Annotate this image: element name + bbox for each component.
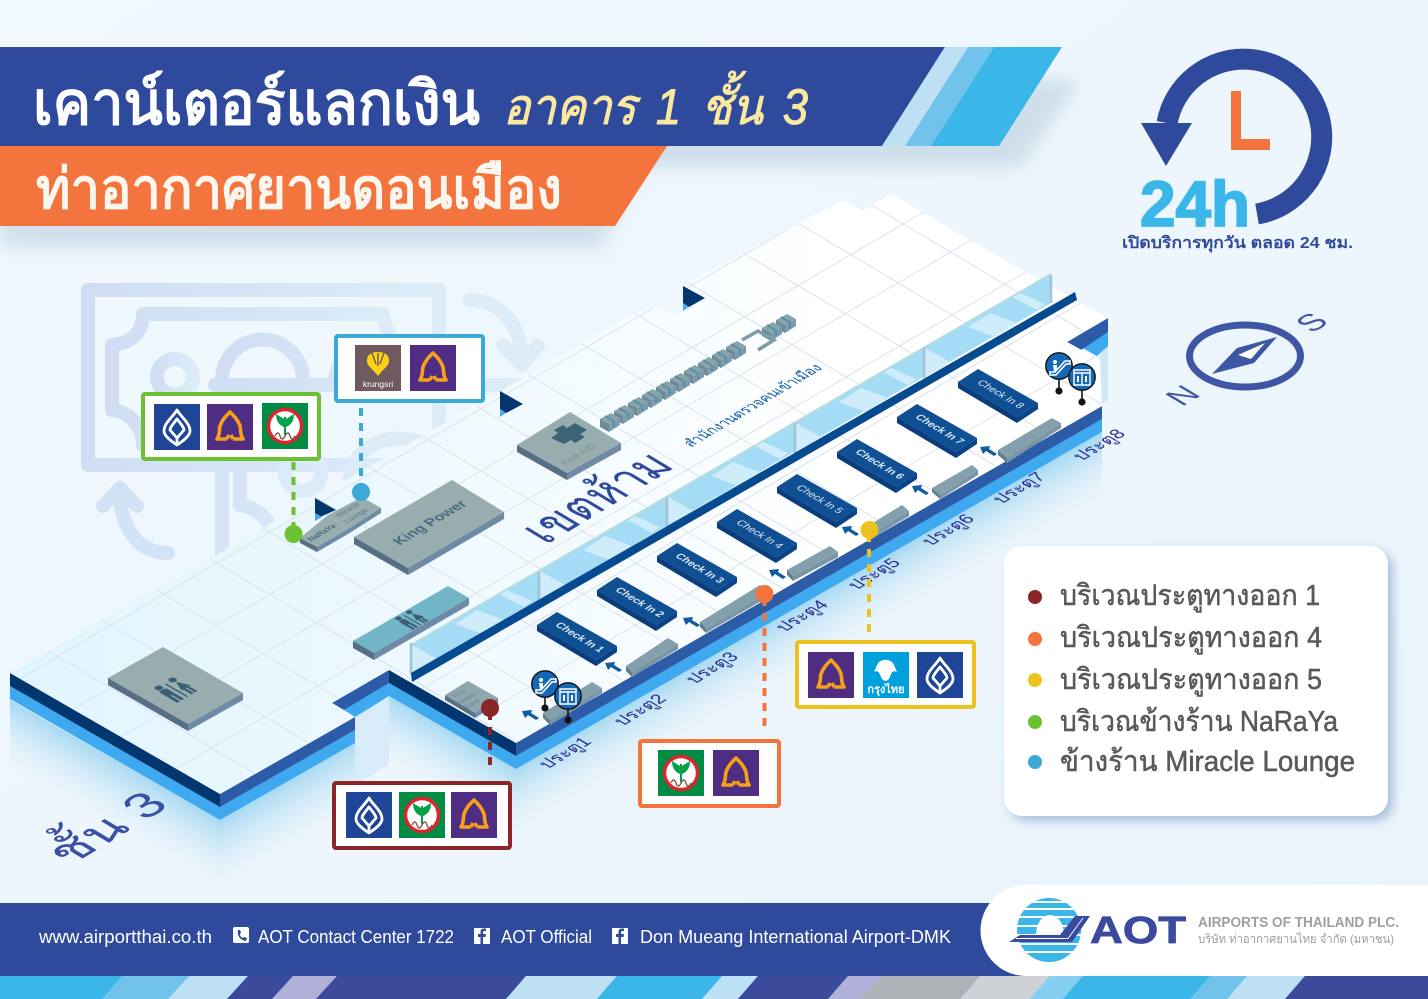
room: First Aid	[517, 412, 621, 480]
callout: exit 5 banks	[797, 642, 974, 707]
shop: Miracle Lounge: Miracle	[334, 501, 362, 518]
shop: Thai Street Food: Thai	[450, 689, 467, 699]
logo: AOT wordmark: AOT	[1090, 910, 1186, 952]
logo: SCB	[410, 345, 456, 391]
room: restroom south-west	[108, 647, 243, 731]
check-in counter 6	[837, 439, 917, 493]
icon: 24 hour clock: 24h	[1140, 168, 1250, 240]
glass wall between zones	[411, 274, 1051, 674]
legend item: exit 5: บริเวณประตูทางออก 5	[1060, 664, 1322, 697]
pin: NaRaYa	[284, 462, 302, 543]
text: open daily 24 hours: เปิดบริการทุกวัน ตลอด 24 ชม.	[1122, 234, 1353, 253]
check-in counter 1	[537, 612, 617, 666]
title: currency exchange counters: เคาน์เตอร์แลกเงิน	[33, 70, 480, 137]
footer: Don Mueang page: Don Mueang International Airport-DMK	[640, 926, 952, 947]
door labels: ประตู2	[609, 691, 672, 729]
room: restroom near glass wall	[353, 586, 469, 660]
shop: King Power: King Power	[390, 498, 472, 548]
check-in counter 4	[717, 509, 797, 563]
legend item: Miracle Lounge: ข้างร้าน Miracle Lounge	[1060, 746, 1355, 778]
shop: Miracle Lounge	[328, 497, 381, 534]
icon: elevator near gate 8	[1069, 364, 1095, 406]
header shadow	[0, 80, 1082, 248]
footer colour strip	[0, 976, 1428, 999]
pin: exit 5	[860, 521, 878, 632]
legend panel	[1004, 546, 1388, 816]
pin: exit 1	[481, 699, 499, 772]
check-in counter 3: Check In 3	[672, 552, 726, 585]
header band: orange airport name	[0, 146, 667, 226]
logo: AOT emblem	[1009, 898, 1090, 963]
icon: 24 hour clock	[1140, 59, 1322, 240]
door labels: ประตู8	[1068, 426, 1131, 464]
legend item: exit 1: บริเวณประตูทางออก 1	[1060, 580, 1320, 613]
icon: facebook	[612, 928, 628, 944]
check-in counter 2	[597, 577, 677, 631]
shop: Thai Street Food: Food	[463, 698, 482, 710]
footer: AOT Official: AOT Official	[501, 926, 592, 947]
icon: compass	[1157, 308, 1336, 411]
icon: compass: S	[1287, 308, 1336, 337]
map: isometric floor plan of level 3	[0, 187, 1131, 885]
icon: elevator near gate 1	[555, 683, 581, 724]
door labels: ประตู3	[681, 649, 744, 687]
shop: Thai Street Food	[445, 681, 498, 718]
door labels: ประตู4	[771, 597, 834, 635]
footer band	[0, 903, 1428, 976]
icon: phone	[233, 927, 249, 943]
wall: bottom corner fade	[220, 743, 355, 885]
floor grid	[20, 205, 1102, 774]
check-in counter 6: Check In 6	[852, 448, 906, 481]
door labels	[534, 426, 1131, 772]
wall: main front fade	[516, 432, 1102, 835]
callout: exit 4 banks	[640, 741, 779, 806]
logo: Krungthai	[863, 652, 909, 698]
door labels: ประตู5	[843, 555, 906, 593]
door labels: ประตู6	[917, 511, 980, 549]
check-in counter 7	[897, 404, 977, 458]
company name Thai: บริษัท ท่าอากาศยานไทย จำกัด (มหาชน)	[1198, 932, 1394, 946]
shop: NaRaYa: NaRaYa	[305, 522, 339, 543]
check-in counter 5	[777, 474, 857, 528]
check-in counter 2: Check In 2	[612, 586, 666, 619]
room: First Aid: First AID	[559, 442, 599, 467]
wall: left front edge bands	[10, 673, 355, 820]
wall: notch	[332, 670, 516, 785]
title accent stripes	[882, 47, 1062, 146]
wall: centre fade	[389, 696, 516, 835]
immigration counters	[600, 314, 796, 432]
door labels: ประตู7	[988, 469, 1051, 507]
logo: Krungsri: krungsri	[363, 379, 393, 389]
title: building and level: อาคาร 1 ชั้น 3	[503, 71, 808, 135]
check-in counter 1: Check In 1	[552, 621, 606, 654]
check-in counter 8: Check In 8	[974, 379, 1026, 411]
shop: King Power	[354, 480, 504, 575]
legend item: NaRaYa: บริเวณข้างร้าน NaRaYa	[1060, 706, 1339, 738]
door gates	[543, 418, 1061, 725]
check-in counter 7: Check In 7	[912, 413, 966, 446]
icon: facebook	[474, 928, 490, 944]
shop: Miracle Lounge: Lounge	[341, 507, 370, 524]
check-in counter 8	[958, 369, 1038, 423]
door arrows	[522, 446, 997, 720]
icon: escalator near gate 8	[1046, 353, 1072, 395]
shop: Thai Street Food: Street	[456, 693, 477, 705]
door labels: ประตู1	[534, 734, 597, 772]
label: level 3: ชั้น 3	[27, 780, 179, 872]
logo: Krungthai: กรุงไทย	[867, 682, 905, 697]
floor surface	[10, 194, 1108, 794]
logo: Krungsri	[355, 345, 401, 391]
pin: exit 4	[756, 585, 774, 732]
legend item: exit 4: บริเวณประตูทางออก 4	[1060, 622, 1322, 655]
check-in counter 4: Check In 4	[733, 519, 785, 551]
pin: Miracle Lounge	[352, 408, 370, 501]
flag markers	[315, 286, 705, 521]
header band: navy title	[0, 47, 1062, 146]
header band: orange airport name: ท่าอากาศยานดอนเมือง	[36, 157, 562, 220]
company name English: AIRPORTS OF THAILAND PLC.	[1198, 915, 1399, 931]
callout: Miracle Lounge banks	[336, 336, 483, 401]
icon: banknote and exchange watermark	[88, 290, 538, 565]
check-in counter 5: Check In 5	[793, 484, 845, 516]
icon: compass: N	[1157, 380, 1208, 411]
zone label: restricted zone: เขตห้าม	[507, 444, 686, 551]
callout: NaRaYa banks	[143, 394, 319, 459]
wall: main front edge bands	[516, 406, 1102, 769]
check-in counter 3	[657, 543, 737, 597]
barrier strip	[411, 292, 1077, 682]
wall: rear right corner	[1067, 318, 1108, 404]
wall: left front fade	[10, 700, 220, 885]
callout: exit 1 banks	[334, 783, 510, 848]
shop: NaRaYa	[300, 515, 348, 552]
AOT logo panel	[981, 885, 1428, 976]
icon: escalator near gate 1	[532, 671, 558, 712]
label: immigration office: สำนักงานตรวจคนเข้าเมือง	[680, 362, 826, 450]
footer: contact center: AOT Contact Center 1722	[258, 926, 454, 947]
footer: website: www.airportthai.co.th	[38, 926, 212, 947]
